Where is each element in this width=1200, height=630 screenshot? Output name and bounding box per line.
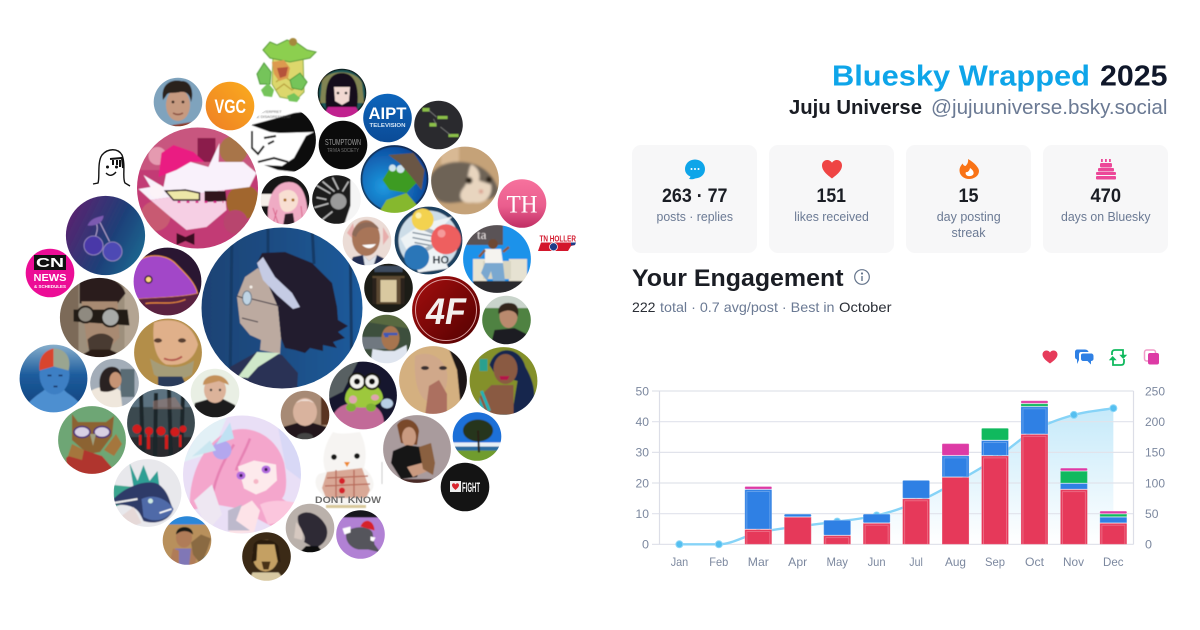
subtitle: name and handle — [789, 97, 1168, 119]
avatar: AIPT Television: TELEVISION — [370, 123, 406, 129]
avatar: Angel with santa hat — [136, 126, 260, 250]
avatar: bald man in black — [279, 389, 331, 441]
avatar: navy dragon — [114, 459, 182, 527]
left axis labels: 20 — [636, 476, 649, 490]
stat card: likes received: 151 — [816, 186, 846, 207]
avatar: TH logo — [498, 179, 546, 228]
stat card: posts and replies — [632, 145, 757, 253]
avatar: owl — [58, 406, 126, 474]
avatar: HO blue red yellow balls — [394, 206, 462, 274]
stat card: day posting streak — [906, 145, 1031, 253]
cumulative area — [679, 408, 1113, 544]
avatar: black and white etching — [312, 175, 360, 224]
avatar: blonde woman with scarf — [134, 318, 202, 386]
right axis labels: 100 — [1145, 476, 1165, 490]
avatar: VGC logo: VGC — [214, 97, 246, 118]
avatar: comic noir man — [250, 110, 316, 172]
month labels: Sep — [985, 555, 1005, 569]
month labels: Mar — [748, 555, 769, 569]
avatar: grey and white cat — [431, 146, 499, 214]
cumulative line — [679, 408, 1113, 544]
right axis labels: 0 — [1145, 538, 1152, 552]
avatar: man in cap — [190, 368, 240, 418]
left axis labels: 40 — [636, 415, 649, 429]
avatar: TH logo: TH — [506, 192, 538, 218]
month labels: May — [826, 555, 848, 569]
bar: March — [745, 486, 772, 544]
month labels: Feb — [709, 555, 729, 569]
icon: flame — [960, 159, 979, 179]
avatar: ornate theater — [364, 264, 413, 312]
avatar: CN News: NEWS — [34, 272, 66, 284]
avatar: comic noir man: INTERPRET — [260, 110, 282, 114]
left axis labels: 0 — [642, 538, 649, 552]
stat card: day posting streak: streak — [952, 226, 986, 240]
avatar: Fight logo — [439, 461, 491, 513]
avatar: woman on stage chair: ta — [477, 227, 487, 242]
month labels: Jun — [868, 555, 886, 569]
engagement summary text: October — [839, 299, 892, 315]
avatar: purple fish — [134, 248, 202, 316]
month labels: Nov — [1063, 555, 1084, 569]
avatar: woman in white coat — [90, 358, 139, 408]
icon: cake — [1096, 159, 1116, 180]
avatar: man in forest — [482, 296, 531, 344]
avatar: woman with blue hair — [470, 347, 538, 415]
avatar: 4F red badge: 4F — [425, 291, 467, 332]
avatar: white plush with plaid shirt — [315, 432, 382, 508]
icon: legend heart — [1042, 350, 1058, 364]
avatar: blonde woman praying — [399, 346, 467, 414]
month labels: Dec — [1103, 555, 1124, 569]
icon: legend quotes — [1144, 350, 1159, 364]
avatar: white plush with plaid shirt: DONT KNOW — [315, 495, 382, 505]
stat card: day posting streak: day posting — [937, 210, 1001, 224]
stat card: days on Bluesky — [1043, 145, 1168, 253]
avatar: VGC logo — [206, 82, 254, 130]
bar: May — [824, 520, 851, 544]
bar: September — [982, 428, 1008, 544]
avatar: Kermit with cowboy hat — [360, 145, 428, 213]
avatar cluster — [18, 38, 576, 582]
chart gridlines and axes — [652, 391, 1134, 544]
subtitle: name and handle: Juju Universe — [789, 97, 922, 119]
month labels: Apr — [788, 555, 807, 569]
avatar: CN News: CN — [36, 255, 64, 270]
avatar: CN News — [26, 248, 74, 298]
avatar: pink haired anime girl — [260, 176, 310, 224]
right axis labels: 50 — [1145, 507, 1159, 521]
month labels: Jan — [671, 555, 688, 569]
month labels: Oct — [1025, 555, 1045, 569]
avatar: man with dog — [162, 516, 212, 565]
avatar: man with blue glasses — [362, 314, 411, 364]
icon: info — [855, 270, 869, 284]
engagement summary text: total · 0.7 avg/post · Best in — [660, 299, 834, 315]
avatar: Stumptown logo: STUMPTOWN — [325, 137, 361, 147]
avatar: dark sequencer screen — [414, 100, 463, 150]
stat card: likes received — [769, 145, 894, 253]
avatar: AIPT Television: AIPT — [368, 104, 407, 123]
left axis labels: 50 — [636, 384, 649, 398]
avatar: pink haired anime portrait — [181, 414, 303, 536]
avatar: hair doodle — [93, 150, 130, 186]
stat card: days on Bluesky: 470 — [1090, 186, 1121, 207]
right axis labels: 150 — [1145, 446, 1165, 460]
bar: October — [1021, 401, 1048, 544]
avatar: shakespeare — [242, 532, 291, 581]
stat card: days on Bluesky: days on Bluesky — [1061, 210, 1151, 224]
stat card: posts and replies: 263 · 77 — [662, 186, 728, 207]
avatar: smiling bald man — [342, 216, 392, 266]
bar: June — [863, 514, 890, 544]
icon: heart — [822, 160, 842, 178]
icon: legend replies — [1075, 350, 1094, 364]
icon: legend reposts — [1110, 350, 1126, 365]
icon: chat bubble — [685, 160, 705, 179]
stacked bars — [745, 401, 1127, 544]
avatar: Stumptown logo: TRIVIA SOCIETY — [327, 148, 360, 154]
bar: April — [784, 514, 811, 544]
avatar: woman holding dog — [381, 413, 453, 485]
avatar: TN Holler logo — [538, 234, 576, 251]
avatar: red abstract painting — [127, 389, 195, 457]
bar: July — [903, 480, 930, 544]
avatar: TN Holler logo: TN HOLLER — [540, 234, 576, 244]
avatar: HO blue red yellow balls: HO — [432, 254, 449, 266]
avatar: dark haired woman — [286, 504, 334, 552]
avatar: man with curly hair — [154, 78, 202, 126]
avatar: grey creature with santa hat — [334, 508, 386, 560]
heading: your engagement: Your Engagement — [632, 265, 844, 292]
avatar: ludicolo sprite — [257, 38, 316, 102]
left axis labels: 30 — [636, 446, 649, 460]
avatar: goggles man — [58, 276, 144, 358]
bar: August — [942, 444, 969, 544]
avatar: goth girl illustration — [318, 68, 366, 118]
avatar: cherries — [64, 194, 146, 276]
bar: November — [1060, 468, 1087, 544]
engagement summary text: 222 — [632, 299, 656, 315]
avatar: comic noir man: THE DISAGREEMENT — [252, 115, 292, 119]
engagement summary text — [632, 299, 892, 315]
cumulative line points — [676, 405, 1117, 548]
left axis labels — [636, 384, 649, 552]
avatar: AIPT Television — [363, 94, 412, 142]
right axis labels — [1145, 384, 1165, 552]
avatar: lone tree — [451, 410, 503, 464]
stat card: posts and replies: posts · replies — [656, 210, 733, 224]
avatar: CN News: & SCHEDULES — [34, 284, 66, 289]
avatar: big portrait, older woman with glasses — [200, 226, 364, 390]
right axis labels: 250 — [1145, 384, 1165, 398]
avatar: 4F red badge — [412, 276, 480, 344]
month labels: Jul — [909, 555, 923, 569]
right axis labels: 200 — [1145, 415, 1165, 429]
stat card: likes received: likes received — [794, 210, 869, 224]
month labels — [671, 555, 1124, 569]
combo chart: monthly engagement bars with cumulative line — [636, 384, 1165, 569]
avatar: woman on stage chair — [463, 225, 531, 293]
stat card: day posting streak: 15 — [958, 186, 979, 207]
avatar: blue man with brain — [20, 344, 88, 412]
avatar: Stumptown logo — [318, 120, 368, 170]
title: Bluesky Wrapped — [832, 60, 1090, 92]
subtitle: name and handle: @jujuuniverse.bsky.social — [931, 97, 1168, 119]
bar: December — [1100, 511, 1127, 544]
chart legend icons — [1042, 350, 1159, 365]
avatar: Fight logo: FIGHT — [462, 479, 480, 495]
month labels: Aug — [945, 555, 966, 569]
left axis labels: 10 — [636, 507, 649, 521]
title: 2025 — [1100, 60, 1168, 92]
avatar: keroppi frog — [329, 362, 397, 430]
